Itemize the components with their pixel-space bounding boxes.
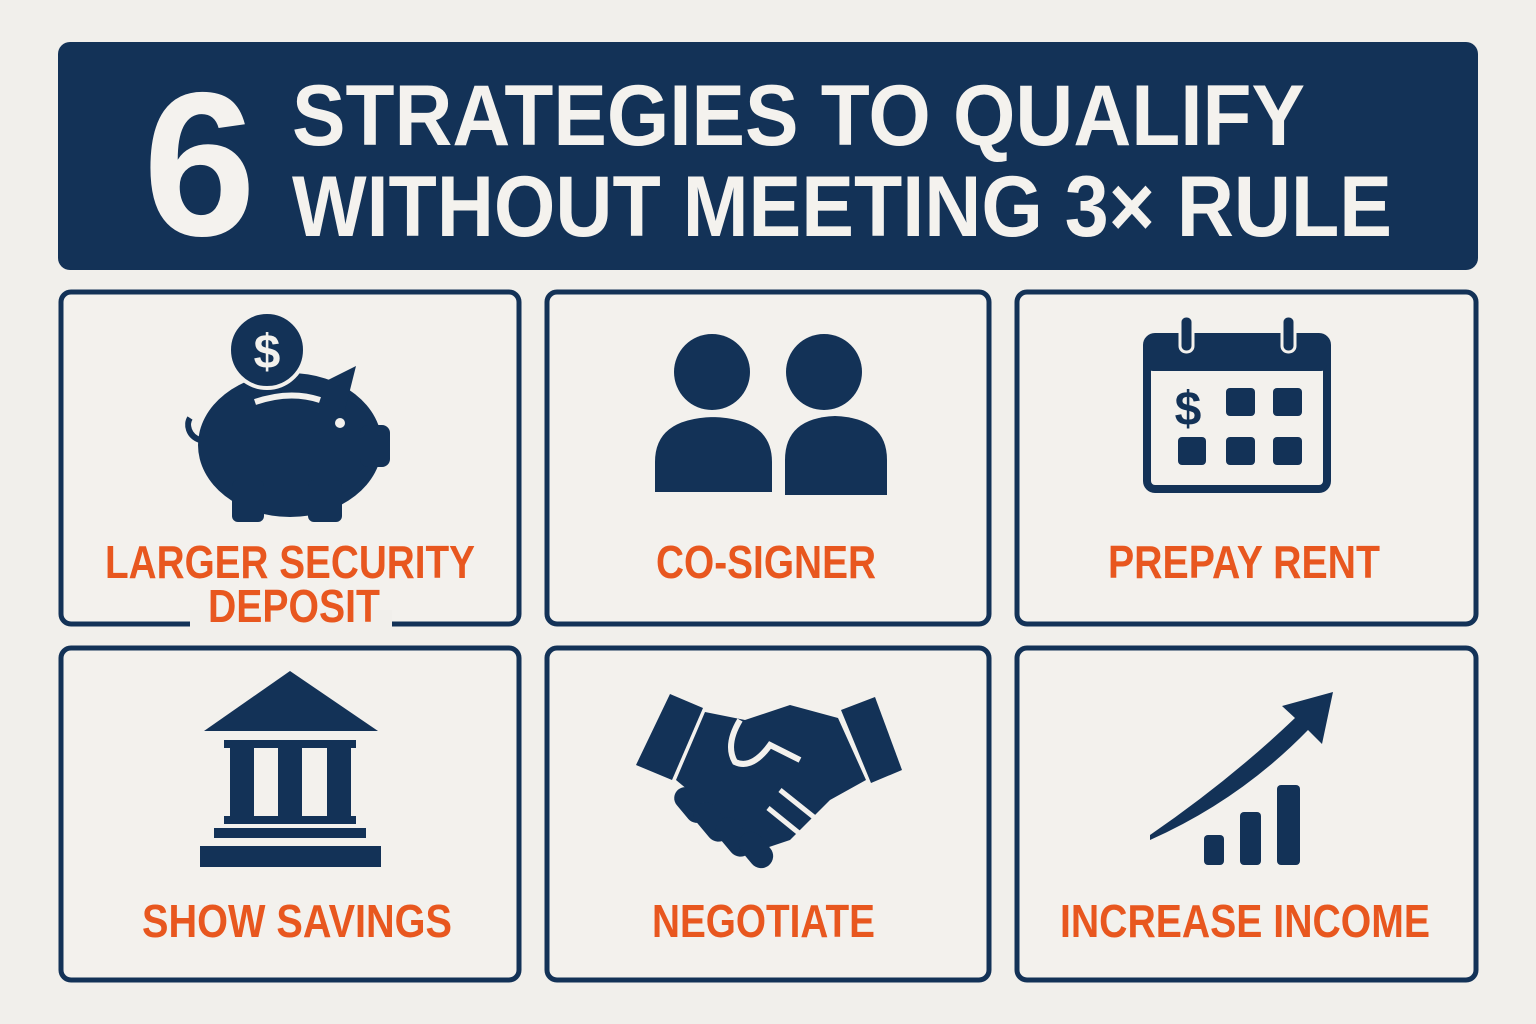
- icon: piggy bank: $: [254, 326, 281, 379]
- icon: handshake: [636, 694, 902, 873]
- label: SHOW SAVINGS: [142, 895, 452, 947]
- icon: bank: [200, 671, 381, 867]
- label: [105, 536, 475, 632]
- title text: [292, 68, 1392, 255]
- panel: show savings: [61, 648, 519, 980]
- icon: two people: [652, 334, 887, 495]
- icon: piggy bank: [188, 312, 390, 522]
- panel: negotiate: [547, 648, 989, 980]
- label: CO-SIGNER: [656, 536, 876, 588]
- icon: calendar: [1147, 316, 1327, 489]
- panel: prepay rent: [1017, 292, 1476, 624]
- title number 6: 6: [143, 50, 256, 279]
- panel: increase income: [1017, 648, 1476, 980]
- title banner: [58, 42, 1478, 279]
- label: PREPAY RENT: [1108, 536, 1380, 588]
- title text: STRATEGIES TO QUALIFY: [292, 68, 1305, 164]
- icon: growth chart: [1150, 692, 1333, 865]
- label: INCREASE INCOME: [1060, 895, 1430, 947]
- icon: calendar: $: [1175, 383, 1202, 436]
- label: LARGER SECURITY: [105, 536, 475, 588]
- label: NEGOTIATE: [652, 895, 875, 947]
- label: DEPOSIT: [208, 580, 380, 632]
- title text: WITHOUT MEETING 3× RULE: [292, 159, 1392, 255]
- panel: larger security deposit: [61, 292, 519, 632]
- panel: co-signer: [547, 292, 989, 624]
